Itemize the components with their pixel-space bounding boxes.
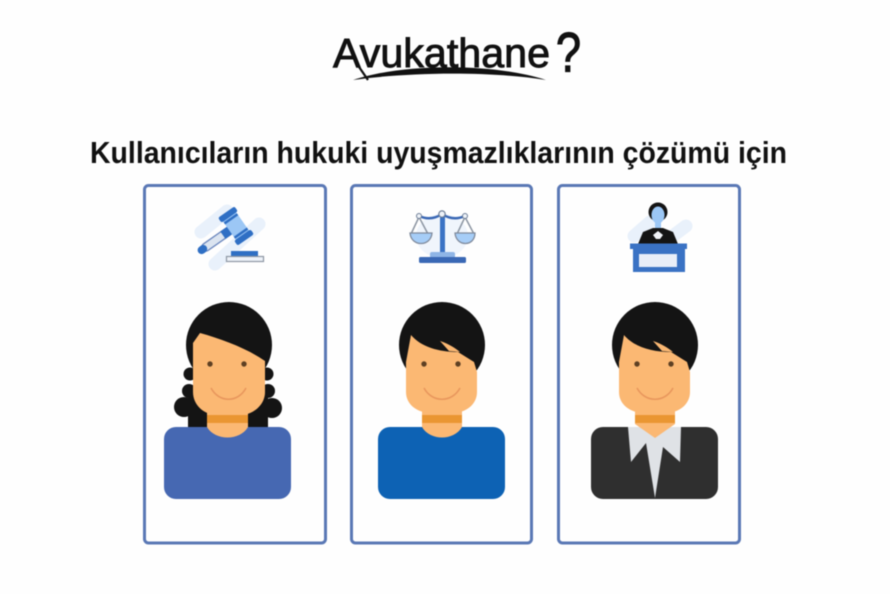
icon: judge at bench: [630, 202, 687, 272]
icon: gavel: [189, 206, 264, 266]
panel: judge bench card: [558, 186, 740, 543]
panel: judge gavel card: [144, 186, 326, 543]
title: Kullanıcıların hukuki uyuşmazlıklarının çözümü için: [90, 135, 787, 170]
logo: Avukathane?: [333, 20, 581, 84]
man avatar, dark suit: [591, 302, 718, 499]
panel: scales card: [352, 186, 532, 543]
logo: Avukathane?: ?: [556, 20, 581, 84]
woman avatar: [164, 302, 291, 499]
man avatar, blue shirt: [378, 302, 505, 499]
logo: Avukathane?: Avukathane: [333, 30, 550, 76]
icon: scales of justice: [410, 211, 475, 263]
shirt: [164, 427, 291, 499]
